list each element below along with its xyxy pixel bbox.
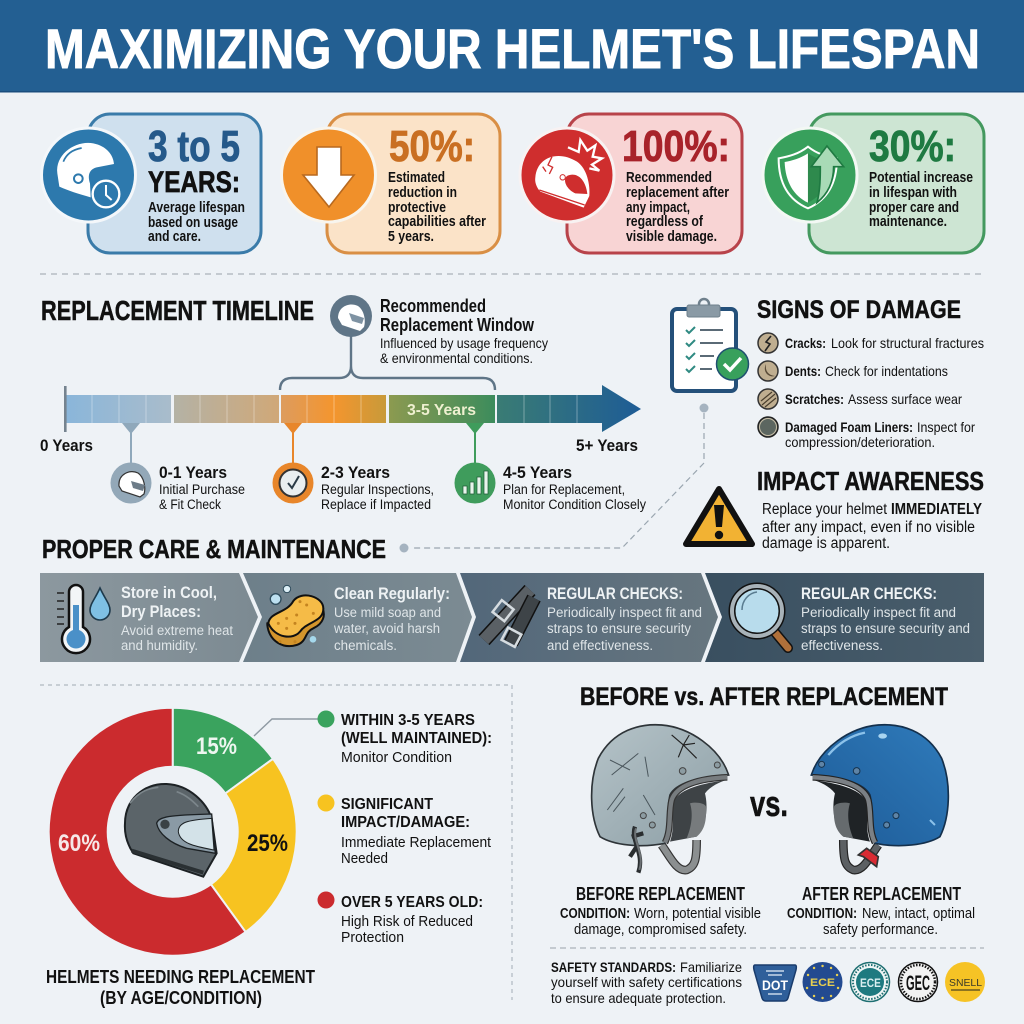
milestone: 0-1 years: 0-1 Years <box>159 463 227 482</box>
label: 5+ years: 5+ Years <box>576 436 638 455</box>
text: after replacement: CONDITION: <box>787 906 857 922</box>
heading: replacement timeline: REPLACEMENT TIMELINE <box>41 295 314 326</box>
legend: significant impact: Needed <box>341 850 388 867</box>
text: safety standards: to ensure adequate protection. <box>551 990 726 1006</box>
panel: care step regular checks straps: straps to ensure security <box>547 621 691 636</box>
panel: signs of damage <box>757 296 984 450</box>
value: 25%: 25% <box>247 830 288 857</box>
panel: stat 3 to 5 years: based on usage <box>148 215 238 231</box>
legend: significant impact: SIGNIFICANT <box>341 796 433 813</box>
text: recommended window: Influenced by usage frequency <box>380 335 548 351</box>
legend: well maintained: Monitor Condition <box>341 749 452 766</box>
panel: stat 30%: in lifespan with <box>869 185 957 201</box>
panel: stat 100%: any impact, <box>626 200 690 216</box>
label: 0 years: 0 Years <box>40 436 93 455</box>
item: scratches <box>758 389 962 409</box>
panel: care step regular checks straps <box>460 573 718 662</box>
icon: magnifying glass <box>732 586 788 648</box>
text: before replacement: BEFORE REPLACEMENT <box>576 884 745 904</box>
panel: care step store cool and dry <box>40 573 258 662</box>
chart: replacement timeline: 3-5 Years <box>407 402 476 419</box>
panel: care step regular checks magnifier <box>705 573 984 662</box>
icon: shield with up arrow <box>779 146 844 208</box>
badge: GEC: GEC <box>906 972 930 995</box>
panel: stat 100%: visible damage. <box>626 229 717 245</box>
badge: ECE teal <box>850 962 890 1002</box>
text: before replacement <box>560 884 761 938</box>
panel: impact awareness: IMPACT AWARENESS <box>757 466 984 496</box>
panel: impact awareness: IMMEDIATELY <box>891 501 983 518</box>
milestone: 0-1 years: & Fit Check <box>159 497 221 512</box>
panel: stat 30%: proper care and <box>869 200 959 216</box>
text: after replacement <box>787 884 975 938</box>
panel: stat 50%: reduction in <box>388 185 457 201</box>
milestone: 4-5 years <box>454 423 646 512</box>
icon: cracked helmet with impact burst <box>535 140 602 208</box>
panel: stat 30% <box>763 114 984 253</box>
badge: DOT <box>754 965 796 1001</box>
connector: 15% slice to legend <box>254 719 318 736</box>
panel: stat 50% <box>282 114 500 253</box>
panel: stat 30%: 30%: <box>869 122 956 171</box>
connector: dashed link from care heading to checklist <box>400 404 708 552</box>
chart: donut of helmets needing replacement <box>49 708 297 956</box>
milestone: 2-3 years: 2-3 Years <box>321 463 390 482</box>
panel: impact awareness <box>757 466 984 552</box>
text: safety standards: yourself with safety certifications <box>551 974 742 990</box>
text: after replacement: AFTER REPLACEMENT <box>802 884 961 904</box>
icon: down arrow <box>303 147 354 207</box>
panel: care step regular checks magnifier: REGULAR CHECKS: <box>801 584 937 603</box>
panel: stat 3 to 5 years <box>42 114 261 253</box>
panel: stat 3 to 5 years: YEARS: <box>148 166 240 199</box>
item: damaged foam liners <box>758 417 975 450</box>
heading: proper care and maintenance: PROPER CARE & MAINTENANCE <box>42 534 386 564</box>
item: cracks: Look for structural fractures <box>831 335 984 351</box>
badge: GEC <box>898 962 938 1002</box>
badge: SNELL: SNELL <box>949 977 982 989</box>
icon: helmet with clock <box>57 143 119 207</box>
text: after replacement: safety performance. <box>823 922 938 938</box>
panel: stat 50%: 50%: <box>389 122 475 171</box>
text: safety standards: Familiarize <box>680 959 742 975</box>
panel: care step clean regularly <box>243 573 472 662</box>
badge: ECE teal: ECE <box>860 976 881 990</box>
milestone: 0-1 years <box>110 423 245 512</box>
bracket: recommended window <box>280 336 495 390</box>
panel: stat 100%: 100%: <box>622 122 730 171</box>
legend: significant impact: Immediate Replacement <box>341 834 492 851</box>
panel: impact awareness: after any impact, even if no visible <box>762 519 975 536</box>
text: recommended window: & environmental conditions. <box>380 350 533 366</box>
panel: stat 3 to 5 years: 3 to 5 <box>148 122 240 171</box>
badge: ECE europe: ECE <box>810 977 835 989</box>
item: dents <box>758 361 948 381</box>
illustration: new helmet <box>811 725 948 870</box>
panel: care step regular checks straps: REGULAR CHECKS: <box>547 584 683 603</box>
legend: well maintained: (WELL MAINTAINED): <box>341 730 492 747</box>
text: recommended window: Recommended <box>380 296 486 316</box>
text: after replacement: New, intact, optimal <box>862 906 975 922</box>
value: 60%: 60% <box>58 830 100 857</box>
heading: before vs after: BEFORE vs. AFTER REPLACEMENT <box>580 683 948 711</box>
panel: care step regular checks magnifier: effectiveness. <box>801 638 883 653</box>
panel: stat 30%: Potential increase <box>869 170 973 186</box>
panel: care step regular checks magnifier: Periodically inspect fit and <box>801 605 956 620</box>
milestone: 4-5 years: Plan for Replacement, <box>503 482 625 497</box>
item: cracks <box>758 333 984 353</box>
chart caption: (BY AGE/CONDITION) <box>100 988 262 1008</box>
item: damaged foam liners: compression/deterioration. <box>785 434 935 450</box>
value: 15%: 15% <box>196 733 237 760</box>
icon: window helmet <box>330 295 372 337</box>
milestone: 2-3 years <box>272 423 434 512</box>
legend: over 5 years old <box>318 892 483 946</box>
panel: impact awareness: Replace your helmet <box>762 501 888 518</box>
icon: full-face helmet <box>125 784 217 877</box>
legend: well maintained <box>318 710 492 766</box>
icon: thermometer and water drop <box>57 585 110 653</box>
chart caption: HELMETS NEEDING REPLACEMENT <box>46 967 315 987</box>
text: before replacement: CONDITION: <box>560 906 630 922</box>
text: before replacement: Worn, potential visible <box>634 906 761 922</box>
panel: stat 100% <box>520 114 742 253</box>
legend: well maintained: WITHIN 3-5 YEARS <box>341 712 475 729</box>
icon: straps with buckles <box>484 590 534 647</box>
panel: care step clean regularly: water, avoid harsh <box>333 621 440 636</box>
milestone: 2-3 years: Replace if Impacted <box>321 497 431 512</box>
panel: care step regular checks straps: and effectiveness. <box>547 638 653 653</box>
badge: ECE europe <box>802 962 842 1002</box>
item: scratches: Scratches: <box>785 391 844 407</box>
panel: stat 3 to 5 years: and care. <box>148 229 201 245</box>
text: before replacement: damage, compromised safety. <box>574 922 747 938</box>
panel: impact awareness: damage is apparent. <box>762 535 890 552</box>
icon: warning triangle <box>686 489 752 544</box>
item: cracks: Cracks: <box>785 335 826 351</box>
panel: care step store cool and dry: Dry Places: <box>121 602 201 621</box>
chart: replacement timeline <box>40 295 646 512</box>
label: vs: vs. <box>750 783 788 824</box>
icon: sponge and bubbles <box>267 585 324 646</box>
illustration: worn helmet <box>592 725 729 873</box>
panel: stat 50%: Estimated <box>388 170 445 186</box>
panel: care step regular checks straps: Periodically inspect fit and <box>547 605 702 620</box>
legend: over 5 years old: OVER 5 YEARS OLD: <box>341 894 483 911</box>
legend: significant impact: IMPACT/DAMAGE: <box>341 814 470 831</box>
panel: care step regular checks magnifier: straps to ensure security and <box>801 621 970 636</box>
panel: care step store cool and dry: and humidity. <box>121 638 198 653</box>
legend: significant impact <box>318 794 492 867</box>
panel: stat 100%: Recommended <box>626 170 712 186</box>
text: safety standards <box>551 959 742 1006</box>
panel: care step store cool and dry: Store in Cool, <box>121 583 217 602</box>
item: scratches: Assess surface wear <box>848 391 962 407</box>
panel: care step clean regularly: Clean Regularly: <box>334 584 450 603</box>
title banner <box>0 0 1024 92</box>
panel: stat 50%: capabilities after <box>388 214 486 230</box>
panel: care step clean regularly: Use mild soap and <box>334 605 441 620</box>
milestone: 4-5 years: 4-5 Years <box>503 463 572 482</box>
panel: stat 3 to 5 years: Average lifespan <box>148 200 245 216</box>
item: dents: Dents: <box>785 363 821 379</box>
text: safety standards: SAFETY STANDARDS: <box>551 959 676 975</box>
milestone: 2-3 years: Regular Inspections, <box>321 482 434 497</box>
panel: stat 50%: protective <box>388 200 446 216</box>
legend: over 5 years old: Protection <box>341 929 404 946</box>
milestone: 0-1 years: Initial Purchase <box>159 482 245 497</box>
icon: clipboard checklist <box>672 299 748 391</box>
panel: stat 100%: regardless of <box>626 214 703 230</box>
text: recommended window <box>380 296 548 366</box>
panel: care step store cool and dry: Avoid extreme heat <box>121 623 233 638</box>
panel: care step clean regularly: chemicals. <box>334 638 397 653</box>
heading: signs of damage: SIGNS OF DAMAGE <box>757 296 961 324</box>
text: recommended window: Replacement Window <box>380 315 535 335</box>
milestone: 4-5 years: Monitor Condition Closely <box>503 497 646 512</box>
item: damaged foam liners: Inspect for <box>917 419 975 435</box>
chart caption <box>46 967 315 1008</box>
panel: stat 100%: replacement after <box>626 185 729 201</box>
item: damaged foam liners: Damaged Foam Liners: <box>785 419 913 435</box>
badge: DOT: DOT <box>762 977 788 993</box>
panel: stat 30%: maintenance. <box>869 214 947 230</box>
panel: stat 50%: 5 years. <box>388 229 434 245</box>
item: dents: Check for indentations <box>825 363 948 379</box>
legend: over 5 years old: High Risk of Reduced <box>341 913 473 930</box>
badge: SNELL <box>945 962 985 1002</box>
